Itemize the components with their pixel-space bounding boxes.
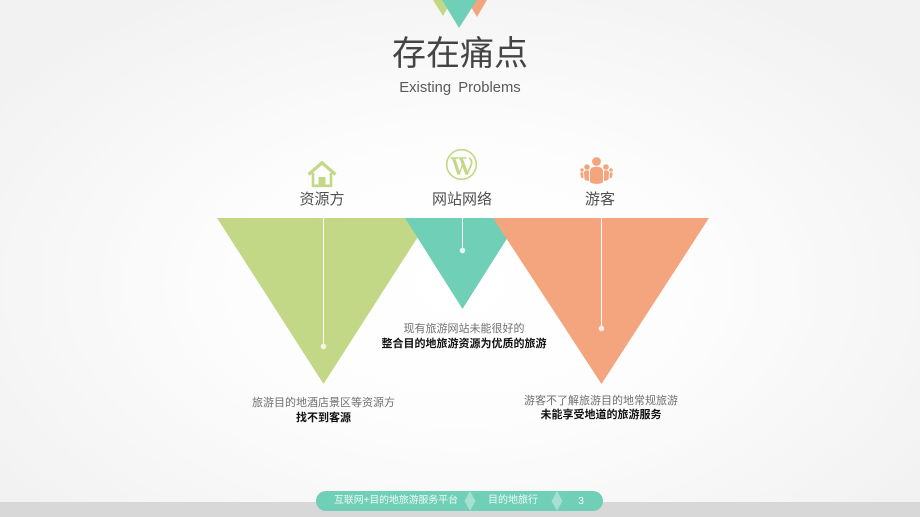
footer pill bbox=[316, 491, 603, 511]
text: orange description bbox=[524, 394, 678, 421]
text: green description: 旅游目的地酒店景区等资源方 bbox=[252, 397, 395, 409]
footer text: destination travel: 目的地旅行 bbox=[488, 495, 538, 506]
text: green description bbox=[252, 396, 395, 424]
footer band bbox=[0, 502, 920, 517]
text: green description: 找不到客源 bbox=[296, 412, 351, 424]
label: 资源方: 资源方 bbox=[299, 191, 344, 208]
footer text: page number: 3 bbox=[578, 495, 584, 507]
subtitle: Existing Problems bbox=[399, 80, 521, 96]
top logo triangles bbox=[433, 0, 487, 28]
footer separators bbox=[464, 491, 562, 511]
text: teal description: 整合目的地旅游资源为优质的旅游 bbox=[382, 338, 546, 350]
triangle: orange bbox=[493, 218, 709, 384]
text: orange description: 未能享受地道的旅游服务 bbox=[540, 409, 662, 421]
triangle: green bbox=[217, 218, 430, 384]
text: teal description bbox=[382, 322, 546, 350]
label: 网站网络: 网站网络 bbox=[432, 191, 492, 208]
icon: house bbox=[308, 160, 336, 188]
text: teal description: 现有旅游网站未能很好的 bbox=[404, 323, 524, 335]
label: 游客: 游客 bbox=[585, 191, 615, 208]
triangle: teal bbox=[405, 218, 520, 309]
footer text: platform: 互联网+目的地旅游服务平台 bbox=[334, 495, 458, 506]
text: orange description: 游客不了解旅游目的地常规旅游 bbox=[524, 394, 678, 406]
title: 存在痛点 bbox=[392, 35, 528, 73]
icon: wordpress bbox=[446, 148, 478, 180]
icon: people bbox=[580, 157, 613, 184]
